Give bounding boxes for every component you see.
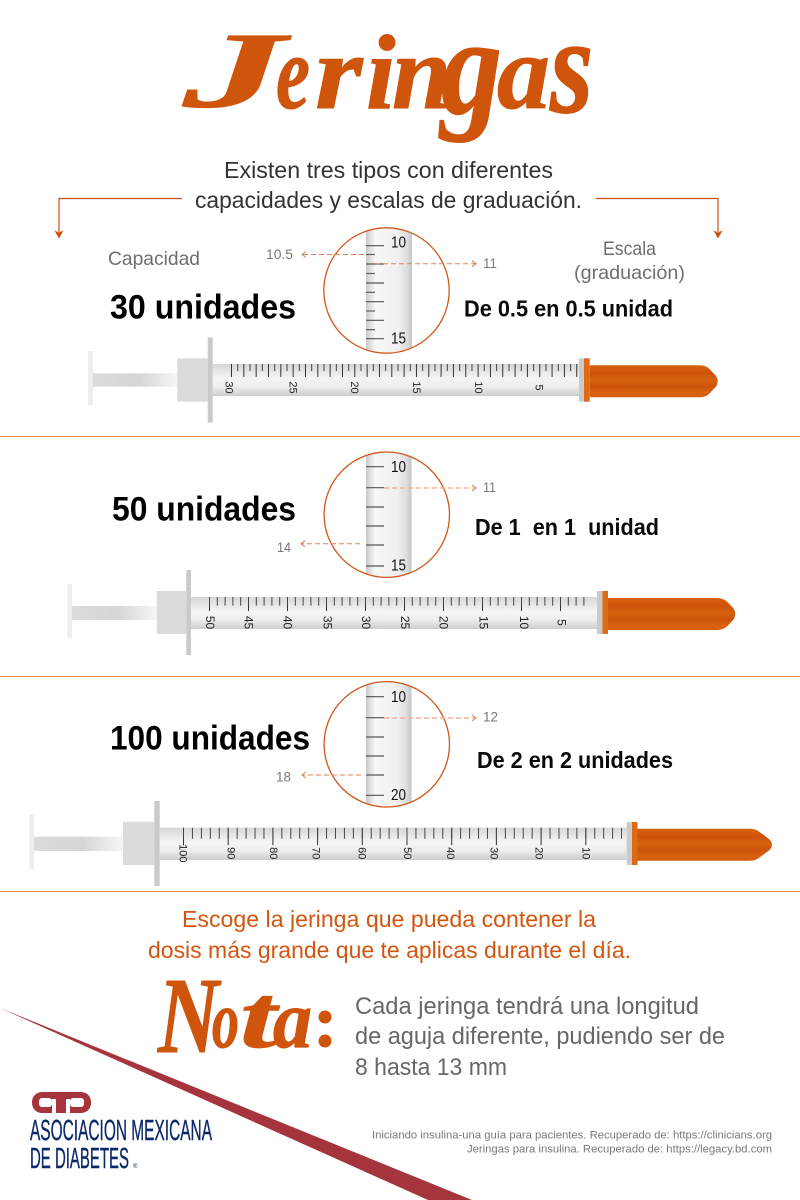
callout: 18 [276,769,361,785]
syringe: 100 units: 20 [532,847,544,859]
syringe: 100 units: 80 [267,847,279,859]
heading: nota: a [273,975,312,1065]
syringe: 100 units: 40 [444,847,456,859]
syringe: 100 units [29,801,772,886]
note text [355,993,725,1081]
note text: de aguja diferente, pudiendo ser de [355,1023,725,1050]
references: Iniciando insulina-una guía para pacientes. Recuperado de: https://clinicians.org [372,1130,772,1142]
syringe: 30 units: 10 [472,381,484,394]
syringe: 30 units: 25 [286,381,298,394]
magnifier: 50 units [324,450,449,580]
references [372,1130,772,1156]
advice text: dosis más grande que te aplicas durante el día. [148,937,631,963]
divider 2 [0,676,800,677]
callout: 11 [384,479,496,495]
logo: asociacion mexicana de diabetes [30,1092,212,1175]
title: r [315,13,364,131]
label: escala [574,238,685,284]
magnifier: 50 units: 15 [391,558,406,575]
arrow: capacity [54,198,182,238]
title: J [182,11,292,130]
heading: 100 unidades: 100 unidades [110,719,310,757]
intro text [195,157,582,213]
advice text: Escoge la jeringa que pueda contener la [182,906,597,932]
syringe: 50 units: 25 [398,616,412,629]
syringe: 30 units: 15 [410,381,422,394]
magnifier: 30 units: 10 [391,234,406,252]
logo: asociacion mexicana de diabetes: ® [133,1163,138,1170]
syringe: 30 units: 20 [348,381,360,394]
callout: 12: 12 [483,709,498,725]
syringe: 50 units: 30 [359,616,373,629]
logo mark [32,1092,91,1113]
intro text: capacidades y escalas de graduación. [195,187,582,213]
heading: 50 unidades: 50 unidades [112,491,296,529]
references: Jeringas para insulina. Recuperado de: https://legacy.bd.com [467,1144,772,1156]
magnifier: 100 units: 10 [391,689,406,706]
syringe: 100 units: 10 [580,847,592,859]
callout: 12 [384,709,498,725]
callout: 10.5: 10.5 [266,246,293,262]
callout: 11: 11 [483,255,497,271]
callout: 11 [375,255,497,271]
syringe: 50 units: 40 [281,616,295,629]
heading: nota: : [313,981,338,1063]
title: e [276,14,310,131]
title: n [392,14,451,131]
syringe: 50 units: 5 [555,619,569,626]
syringe: 30 units [88,337,718,423]
syringe: 50 units: 50 [203,616,217,629]
title: i [366,14,395,131]
syringe: 100 units: 90 [225,847,237,859]
heading: nota: t [240,968,280,1067]
syringe: 100 units: 30 [487,847,499,859]
scale text: 0.5: De 0.5 en 0.5 unidad [464,296,673,322]
label: escala: (graduación) [574,262,685,284]
label: capacidad: Capacidad [108,248,200,270]
syringe: 100 units: 60 [356,847,368,859]
syringe: 30 units: 5 [532,384,544,391]
syringe: 50 units: 10 [517,616,531,629]
note text: Cada jeringa tendrá una longitud [355,993,699,1020]
label: escala: Escala [603,238,656,260]
advice text [148,906,631,963]
magnifier: 100 units [324,680,449,810]
callout: 10.5 [266,246,364,262]
heading: nota [157,956,338,1075]
syringe: 100 units: 70 [310,847,322,859]
diagonal band [0,1008,472,1200]
divider 3 [0,891,800,892]
heading: 30 unidades: 30 unidades [110,289,296,327]
callout: 14 [277,539,360,555]
syringe: 50 units: 35 [320,616,334,629]
syringe: 50 units: 15 [476,616,490,629]
callout: 11: 11 [483,479,496,495]
note text: 8 hasta 13 mm [355,1054,507,1081]
divider 1 [0,436,800,437]
magnifier: 50 units: 10 [391,459,406,476]
syringe: 30 units: 30 [222,381,234,394]
magnifier: 30 units: 15 [391,331,406,348]
syringe: 100 units: 100 [176,844,188,862]
syringe: 50 units: 45 [241,616,255,629]
heading: nota: N [157,956,221,1075]
scale text: 2: De 2 en 2 unidades [477,747,673,773]
logo: asociacion mexicana de diabetes: ASOCIACION MEXICANA [30,1115,212,1147]
logo: asociacion mexicana de diabetes: DE DIABETES [30,1143,129,1175]
syringe: 50 units: 20 [436,616,450,629]
magnifier: 100 units: 20 [391,787,406,804]
title [182,0,593,144]
callout: 18: 18 [276,769,291,785]
intro text: Existen tres tipos con diferentes [224,157,553,183]
scale text: 1: De 1 en 1 unidad [475,514,659,540]
syringe: 50 units [67,570,735,655]
title: a [497,14,550,131]
magnifier: 30 units [324,225,449,355]
arrow: scale [596,198,722,238]
syringe: 100 units: 50 [401,847,413,859]
callout: 14: 14 [277,539,291,555]
heading: nota: o [212,975,239,1066]
